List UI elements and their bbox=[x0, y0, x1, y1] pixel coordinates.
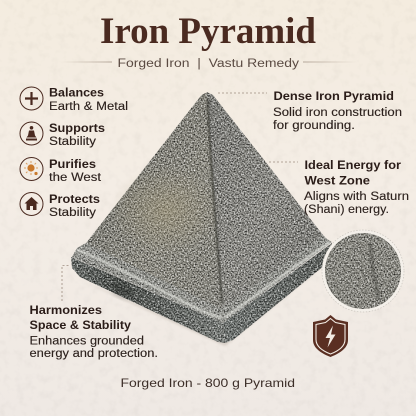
callout: dense iron pyramid: for grounding. bbox=[273, 120, 355, 132]
left face bbox=[83, 92, 222, 312]
warm sheen on left face bbox=[110, 165, 220, 255]
footer caption: Forged Iron - 800 g Pyramid bbox=[120, 376, 295, 390]
benefit: protects bbox=[20, 192, 100, 219]
subtitle with rules: Forged Iron | Vastu Remedy bbox=[118, 58, 299, 70]
leader line: west zone bbox=[269, 161, 298, 163]
benefit: supports: Supports bbox=[49, 123, 105, 135]
iron pyramid bbox=[71, 92, 333, 346]
title: Iron Pyramid bbox=[100, 11, 316, 52]
right base edge bbox=[223, 243, 332, 343]
right face bbox=[207, 92, 329, 312]
benefit: protects: Stability bbox=[49, 207, 96, 219]
leader line: apex bbox=[218, 92, 267, 94]
benefit: supports: Stability bbox=[49, 136, 96, 148]
rim highlights bbox=[77, 242, 330, 318]
callout: ideal energy: West Zone bbox=[304, 176, 370, 188]
callout: dense iron pyramid bbox=[273, 91, 402, 132]
magnified texture circle bbox=[322, 230, 404, 312]
callout: harmonizes: Space & Stability bbox=[30, 320, 132, 332]
benefit list bbox=[20, 87, 128, 219]
callout: harmonizes: Enhances grounded bbox=[30, 336, 144, 348]
callout: ideal energy: Ideal Energy for bbox=[304, 160, 402, 172]
benefit: purifies bbox=[20, 158, 102, 184]
benefit: purifies: Purifies bbox=[49, 159, 96, 171]
pyramid drop shadow bbox=[80, 258, 333, 346]
callout: harmonizes: energy and protection. bbox=[30, 348, 158, 360]
left rim bbox=[72, 243, 223, 323]
leader line: base corner bbox=[62, 266, 69, 301]
callout: ideal energy: Aligns with Saturn bbox=[304, 191, 409, 203]
left base edge bbox=[71, 257, 225, 343]
callout: harmonizes: Harmonizes bbox=[30, 305, 102, 317]
callout: dense iron pyramid: Dense Iron Pyramid bbox=[274, 91, 394, 103]
callout: harmonizes bbox=[30, 305, 158, 360]
benefit: balances: Balances bbox=[49, 88, 104, 100]
callout: ideal energy: (Shani) energy. bbox=[304, 204, 389, 216]
dark patch on left edge bbox=[110, 280, 134, 300]
right rim bbox=[222, 236, 332, 323]
icon: shield with lightning bolt bbox=[313, 315, 348, 357]
benefit: protects: Protects bbox=[49, 194, 100, 206]
benefit: supports bbox=[20, 122, 105, 148]
benefit: balances: Earth & Metal bbox=[49, 101, 128, 113]
benefit: balances bbox=[20, 87, 128, 113]
callout: dense iron pyramid: Solid iron construction bbox=[273, 107, 402, 119]
central ridge bbox=[208, 100, 222, 303]
callout: ideal energy bbox=[304, 160, 409, 216]
benefit: purifies: the West bbox=[49, 172, 102, 184]
pyramid body bbox=[71, 92, 332, 343]
